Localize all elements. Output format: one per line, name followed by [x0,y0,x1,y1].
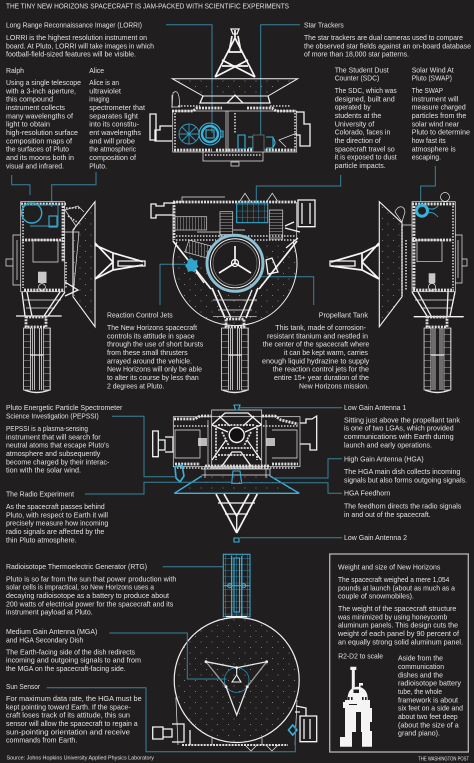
text: PEPSSI: PEPSSI is a plasma-sensing [6,424,88,433]
text: Medium Gain Antenna [6,627,141,673]
text: Reaction Control Jets: The New Horizons spacecraft [107,323,197,332]
text: Alice: ultraviolet [89,86,121,95]
panel: weight and size: an equally strong solid aluminum panel. [338,637,463,646]
text: Ralph: visual and infrared. [6,161,64,170]
text: Sun Sensor: Sun Sensor [6,682,40,691]
text: LORRI [6,20,154,59]
text: Propellant Tank: enough liquid hydrazine to supply [262,356,370,365]
text: Propellant Tank: This tank, made of corrosion- [275,323,367,332]
panel: weight and size: aluminum panels. This design cuts the [338,621,458,630]
panel: weight and size: Aside from the [398,654,443,663]
text: Low Gain Antenna 1: is one of two LGAs, which provided [344,424,454,433]
text: Alice: ent wavelengths [89,128,141,137]
text: Propellant Tank: Propellant Tank [319,311,368,320]
text: Student Dust Counter: Counter (SDC) [335,74,379,83]
text: Low Gain Antenna 2: Low Gain Antenna 2 [344,533,407,542]
text: LORRI: Long Range Reconnaissance Imager (LORRI) [6,20,142,30]
text: SWAP: particles from the [412,111,466,120]
text: Ralph: and its moons both in [6,153,74,162]
text: Ralph: with a 3-inch aperture, [5,86,76,95]
text: Propellant Tank: the center of the spacecraft where [263,340,369,349]
panel: weight and size: communication [398,662,444,671]
text: Sun Sensor: sun-pointing orientation and receive [6,727,130,736]
text: Alice: separates light [89,111,138,120]
text: High Gain Antenna [344,454,467,484]
panel: weight and size: six feet on a side and [398,704,463,713]
text: Student Dust Counter: students at the [335,111,381,120]
text: Medium Gain Antenna: the MGA on the spacecraft-facing side. [6,664,126,673]
spacecraft view 1: top elevation with dish and tower [150,29,310,166]
text: Radio Experiment: thin Pluto atmosphere. [6,535,77,544]
text: High Gain Antenna: The HGA main dish collects incoming [344,467,460,476]
text: SWAP [412,65,470,162]
text: Radio Experiment: As the spacecraft passes behind [6,502,105,511]
text: Medium Gain Antenna: The Earth-facing side of the dish redirects [6,647,135,656]
panel: weight and size: The spacecraft weighed a mere 1,054 [338,575,449,584]
panel: weight and size: framework is about [398,695,458,704]
text: RTG: Radioisotope Thermoelectric Generator (RTG) [6,562,147,571]
text: PEPSSI [6,403,123,475]
text: Reaction Control Jets [107,311,204,390]
text: Low Gain Antenna 1 [344,403,460,449]
text: Reaction Control Jets: controls its attitude in space [107,331,195,340]
text: Alice: imaging [89,95,109,104]
text: Sun Sensor: craft loses track of its attitude, this sun [6,711,130,720]
text: LORRI: board. At Pluto, LORRI will take images in which [6,41,154,50]
leader lines: lower section [47,567,295,752]
panel: weight and size: The weight of the spacecraft structure [338,604,456,613]
text: Reaction Control Jets: Reaction Control Jets [107,311,173,320]
text: Radio Experiment [6,490,108,544]
spacecraft view 2: left side elevation [6,202,145,392]
text: Low Gain Antenna 1: communications with Earth during [344,432,454,441]
text: Low Gain Antenna 1: Low Gain Antenna 1 [344,403,406,412]
panel: weight and size: dishes and the [398,670,443,679]
text: Propellant Tank: entire 15+ year duration of the [274,373,369,382]
text: PEPSSI: become charged by their interac- [6,457,110,466]
text: Radio Experiment: precisely measure how incoming [6,519,108,528]
text: Sun Sensor: sensor will allow the spacecraft to regain a [6,719,139,728]
text: SWAP: escaping. [412,153,441,162]
text: Ralph: light to obtain [6,120,50,129]
text: SWAP: instrument will [412,94,459,103]
text: Medium Gain Antenna: and HGA Secondary Dish [6,635,83,644]
text: High Gain Antenna: signals but also forms outgoing signals. [344,475,467,484]
text: Student Dust Counter: the direction of [335,136,382,145]
text: Radio Experiment: Pluto, with respect to Earth it will [6,510,108,519]
text: PEPSSI: instrument that will search for [6,432,101,441]
text: Reaction Control Jets: 2 degrees at Pluto. [107,381,164,390]
text: Propellant Tank [262,311,370,390]
text: Star Trackers: The star trackers are dual cameras used to compare [304,33,463,42]
panel: weight and size: R2-D2 to scale [338,652,383,661]
text: SWAP: Pluto to determine [412,128,470,137]
panel: weight and size: radioisotope battery [398,679,461,688]
text: Sun Sensor: kept pointing toward Earth. If the space- [6,702,131,711]
text: SWAP: measure charged [412,103,466,112]
text: Alice: and will probe [89,136,135,145]
text: Alice: Pluto. [89,161,107,170]
text: Ralph: the surfaces of Pluto [6,145,69,154]
text: Ralph: Ralph [6,66,24,75]
leader lines: upper section [12,25,435,305]
text: Radio Experiment: The Radio Experiment [6,490,74,499]
text: Reaction Control Jets: from these small thrusters [107,348,188,357]
text: Alice [89,66,145,170]
text: Star Trackers: Star Trackers [304,20,344,30]
spacecraft view 5: middle elevation, HGA and antennas [153,405,317,542]
text: Student Dust Counter: University of [335,119,375,128]
text: Alice: Alice is an [89,78,119,87]
text: Student Dust Counter: designed, built and [335,94,395,103]
text: Alice: composition of [89,153,137,162]
text: LORRI: football-field-sized features will be visible. [6,50,136,59]
spacecraft view 6: dish face with RTG [153,554,317,751]
text: SWAP: atmosphere is [412,144,456,153]
text: Ralph: Using a single telescope [6,78,81,87]
text: RTG: 200 watts of electrical power for the spacecraft and its [6,599,174,608]
text: PEPSSI: tion with the solar wind. [6,466,81,475]
panel: weight and size: pounds at launch (about as much as a [338,583,456,592]
text: PEPSSI: Science Investigation (PEPSSI) [6,412,99,421]
text: Ralph: instrument collects [6,103,65,112]
text: RTG: decaying radioisotope as a battery to produce about [6,591,169,600]
text: PEPSSI: neutral atoms that escape Pluto's [6,441,109,450]
text: Sun Sensor [6,682,142,745]
text: Star Trackers: of more than 18,000 star patterns. [304,50,409,59]
text: High Gain Antenna: High Gain Antenna (HGA) [344,454,424,463]
panel: weight and size: about two feet deep [398,712,458,721]
text: HGA Feedhorn: The feedhorn directs the radio signals [344,502,462,511]
text: PEPSSI: Pluto Energetic Particle Spectrometer [6,403,123,412]
panel: weight and size: (about the size of a [398,720,460,729]
text: Sun Sensor: commands from Earth. [6,736,77,745]
text: Alice: the atmospheric [89,145,136,154]
text: Student Dust Counter: Colorado, faces in [335,128,390,137]
text: Ralph [5,66,81,170]
text: Propellant Tank: it can be kept warm, carries [284,348,368,357]
text: Sun Sensor: For maximum data rate, the HGA must be [6,694,142,703]
text: RTG: Pluto is so far from the sun that power production with [6,574,176,583]
text: Student Dust Counter: spacecraft travel so [335,144,395,153]
text: Radio Experiment: radio signals are affected by the [6,527,104,536]
text: Student Dust Counter: The Student Dust [335,65,389,74]
text: Ralph: composition maps of [6,136,73,145]
leader lines: middle section [85,408,342,538]
text: LORRI: LORRI is the highest resolution instrument on [6,33,147,42]
text: Propellant Tank: resistant titanium and nestled in [267,331,368,340]
panel: weight and size [330,554,468,752]
text: Low Gain Antenna 1: launch and early operations. [344,440,432,449]
text: RTG [6,562,176,617]
text: SWAP: how fast its [412,136,446,145]
text: HGA Feedhorn [344,489,462,519]
text: Ralph: this compound [6,95,53,104]
title: THE TINY NEW HORIZONS SPACECRAFT IS JAM-PACKED WITH SCIENTIFIC EXPERIMENTS [6,2,289,10]
text: SWAP: Solar Wind At [412,65,454,74]
text: Ralph: many wavelengths of [6,111,74,120]
text: Student Dust Counter: it is exposed to dust [335,153,397,162]
text: RTG: instrument payload at Pluto. [6,608,93,617]
panel: weight and size: couple of snowmobiles). [338,592,414,601]
text: Propellant Tank: the reaction control jets for the [273,365,369,374]
icon: R2-D2 silhouette [340,667,372,747]
text: SWAP: The SWAP [412,86,443,95]
text: Student Dust Counter: operated by [335,103,371,112]
text: Propellant Tank: New Horizons mission. [299,381,369,390]
text: SWAP: solar wind near [412,119,460,128]
text: Reaction Control Jets: to alter its course by less than [107,373,199,382]
text: Student Dust Counter [335,65,397,170]
panel: weight and size: tube, the whole [398,687,442,696]
text: Star Trackers: the observed star fields against an on-board database [304,41,471,50]
panel: weight and size: grand piano). [398,729,440,738]
text: Reaction Control Jets: through the use of short bursts [107,340,204,349]
text: Reaction Control Jets: New Horizons will only be able [107,365,202,374]
text: Alice: Alice [89,66,104,75]
panel: weight and size: weight of each panel by 90 percent of [337,629,460,638]
text: HGA Feedhorn: HGA Feedhorn [344,489,390,498]
panel: weight and size: was minimized by using honeycomb [337,612,447,621]
text: Low Gain Antenna 1: Sitting just above the propellant tank [344,415,460,424]
text: Medium Gain Antenna: incoming and outgoing signals to and from [6,656,141,665]
spacecraft view 3: centre plan view with propellant tank [151,193,315,392]
text: Ralph: high-resolution surface [6,128,78,137]
text: PEPSSI: atmosphere and subsequently [6,449,101,458]
text: SWAP: Pluto (SWAP) [412,74,452,83]
spacecraft view 4: right side elevation [330,192,467,392]
text: Medium Gain Antenna: Medium Gain Antenna (MGA) [6,627,97,636]
text: Star Trackers [304,20,471,59]
text: Student Dust Counter: particle impacts. [335,161,386,170]
text: Alice: spectrometer that [89,103,145,112]
text: Student Dust Counter: The SDC, which was [335,86,397,95]
text: RTG: solar cells is impractical, so New Horizons uses a [6,583,155,592]
text: Alice: into its constitu- [89,120,140,129]
text: Reaction Control Jets: arrayed around the vehicle. [107,356,192,365]
text: HGA Feedhorn: in and out of the spacecraft. [344,510,431,519]
source credit: Source: Johns Hopkins University Applied Physics Laboratory [6,755,154,761]
panel: weight and size: Weight and size of New Horizons [338,563,441,572]
